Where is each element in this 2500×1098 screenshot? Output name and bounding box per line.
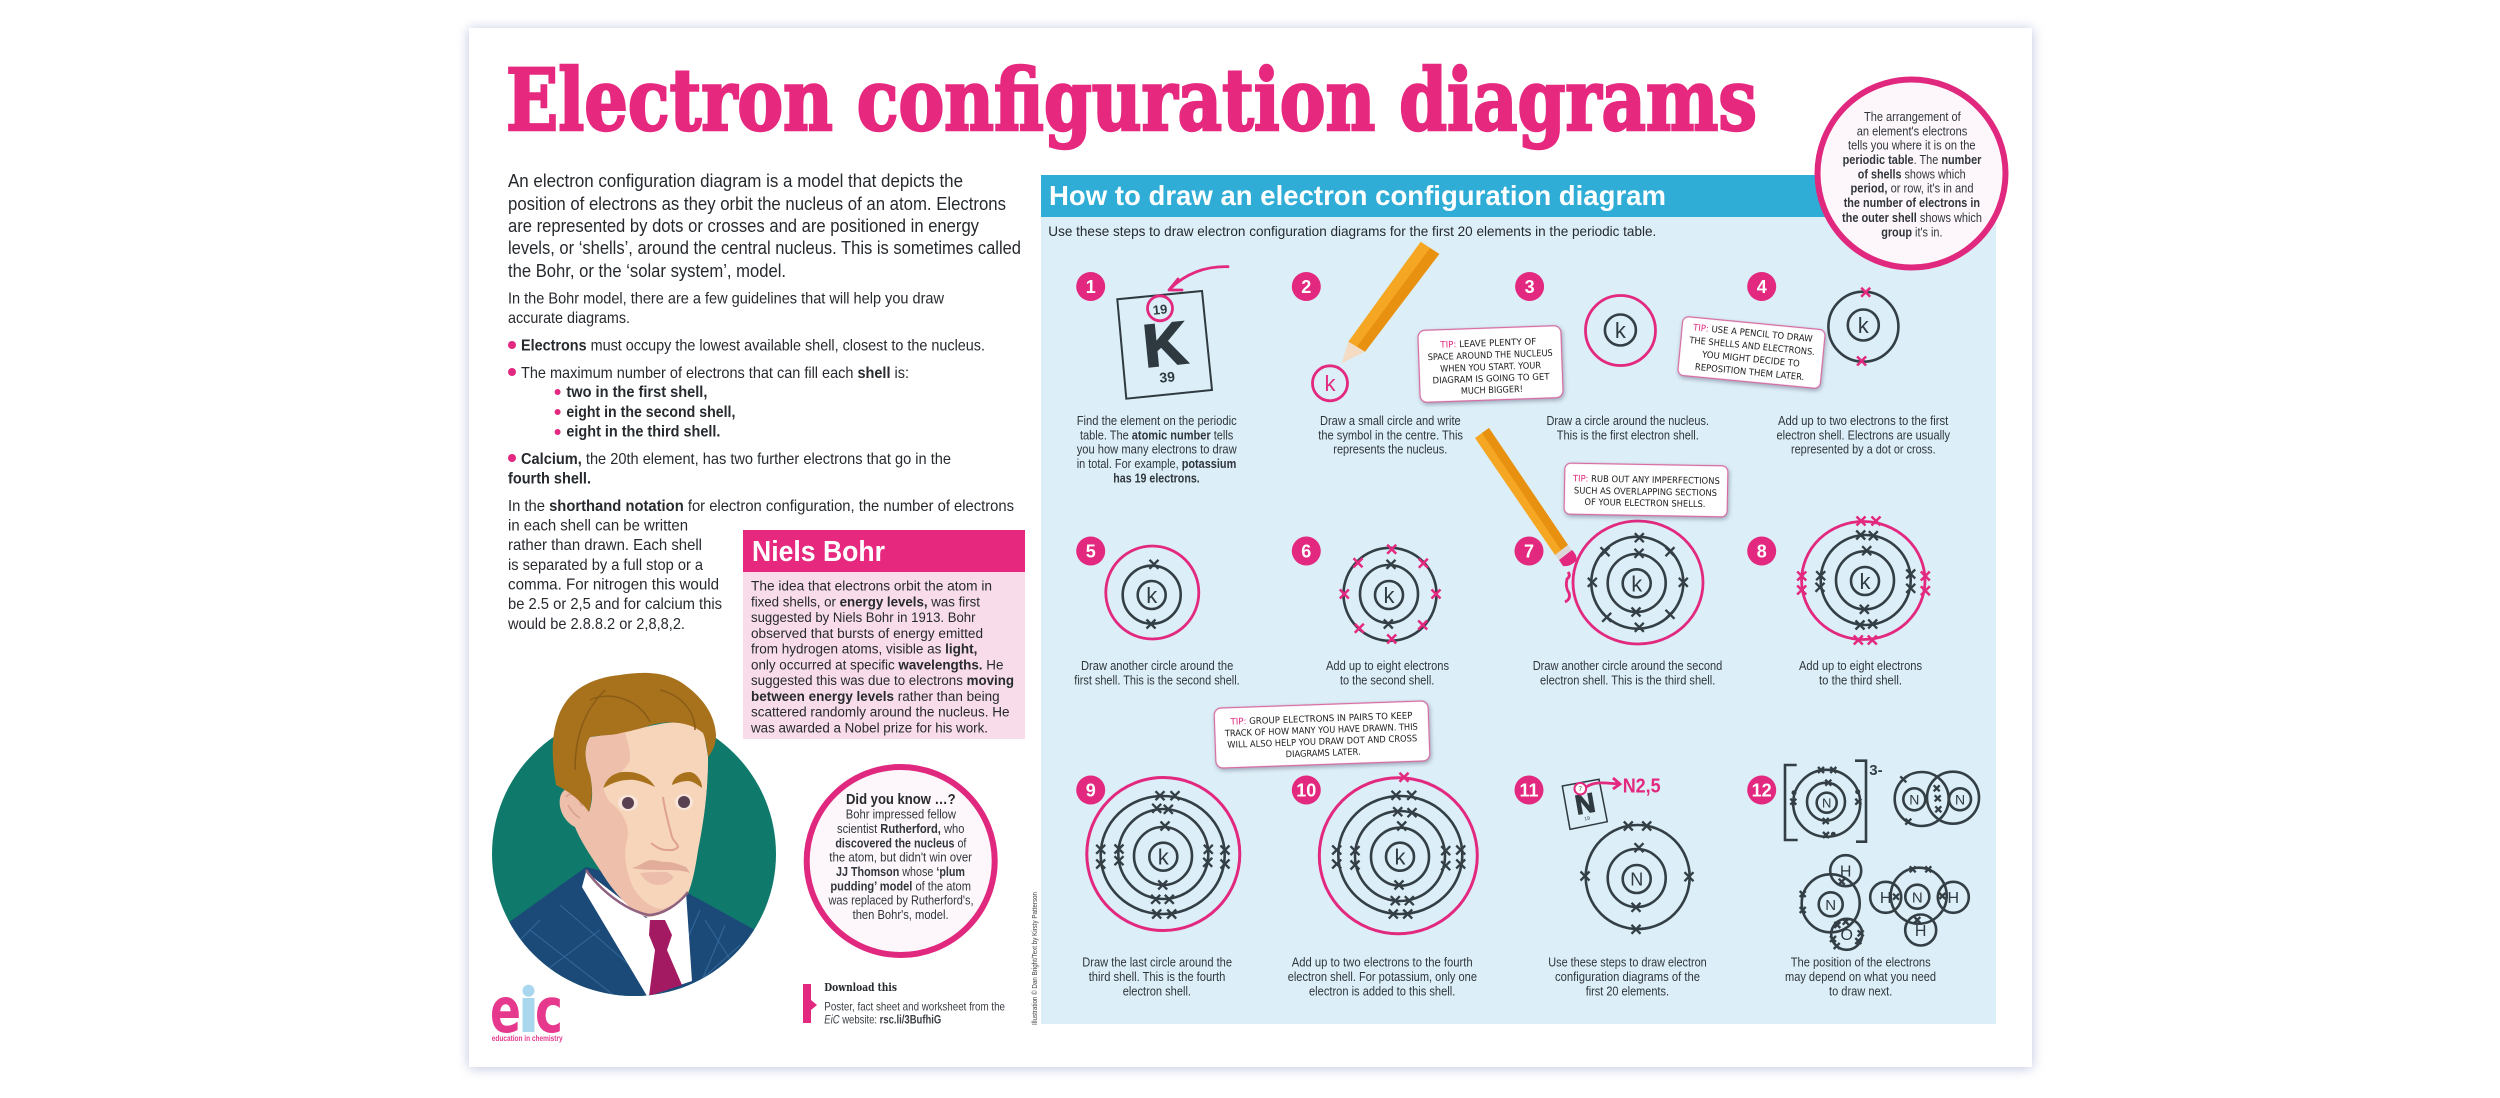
step 2: k — [1324, 371, 1336, 396]
step 8: k — [1860, 569, 1872, 594]
text block: Bohr model guidelines — [508, 290, 985, 488]
diagram: nitrogen compound with hydrogen and oxygen: N — [1825, 897, 1836, 914]
step 1: in total. For example, potassium — [1077, 457, 1236, 471]
text block: shorthand notation: would be 2.8.8.2 or 2,8,8,2. — [507, 616, 685, 633]
text block: introduction: the Bohr, or the ‘solar system’, model. — [508, 260, 786, 281]
text block: Bohr biography: The idea that electrons orbit the atom in — [751, 578, 992, 594]
step 1: table. The atomic number tells — [1080, 428, 1233, 442]
callout: did you know: JJ Thomson whose ‘plum — [836, 865, 965, 879]
callout: download this — [803, 980, 1005, 1027]
step 9: third shell. This is the fourth — [1089, 970, 1225, 984]
tip: rub out: SUCH AS OVERLAPPING SECTIONS — [1574, 486, 1717, 499]
step 1: 1 — [1086, 277, 1096, 297]
logo: education in chemistry — [490, 974, 563, 1047]
callout: arrangement of electrons: an element's electrons — [1857, 124, 1967, 138]
step 1: 39 — [1159, 368, 1176, 386]
tip: use a pencil: REPOSITION THEM LATER. — [1694, 363, 1805, 383]
step 3: 3 — [1525, 277, 1535, 297]
step 11: first 20 elements. — [1586, 984, 1669, 998]
text block: Bohr biography: scattered randomly around the nucleus. He — [751, 705, 1010, 721]
step 10 — [1288, 773, 1477, 998]
tip: group electrons: TIP: GROUP ELECTRONS IN PAIRS TO KEEP — [1229, 711, 1413, 728]
step 1: you how many electrons to draw — [1077, 443, 1237, 457]
icon: pencil eraser — [1475, 428, 1576, 566]
step 3: This is the first electron shell. — [1557, 428, 1699, 442]
text block: shorthand notation: comma. For nitrogen this would — [508, 576, 719, 594]
diagram: nitrogen molecule: N — [1909, 792, 1919, 808]
diagram: ammonia molecule: H — [1915, 923, 1926, 940]
text block: Bohr model guidelines: accurate diagrams. — [508, 310, 630, 327]
callout: download this: EiC website: rsc.li/3BufhiG — [824, 1013, 941, 1027]
diagram: ammonia molecule: H — [1880, 890, 1891, 907]
text block: Bohr model guidelines: In the Bohr model, there are a few guidelines that will help you draw — [508, 290, 944, 308]
text block: Bohr biography: fixed shells, or energy levels, was first — [751, 594, 980, 610]
step 8: Add up to eight electrons — [1799, 659, 1922, 673]
diagram: ammonia molecule: H — [1948, 890, 1959, 907]
diagram: ammonia molecule — [1870, 866, 1969, 946]
panel: how to draw — [1041, 175, 1996, 1024]
callout: did you know: then Bohr's, model. — [853, 908, 949, 922]
panel: Niels Bohr — [743, 530, 1025, 739]
step 10: electron shell. For potassium, only one — [1288, 970, 1477, 984]
callout: download this: Poster, fact sheet and worksheet from the — [824, 1000, 1005, 1014]
text block: Bohr biography: observed that bursts of energy emitted — [751, 626, 983, 642]
text block: shorthand notation: is separated by a full stop or a — [508, 557, 703, 574]
step 6 — [1292, 536, 1449, 687]
callout: arrangement of electrons: The arrangement of — [1864, 110, 1961, 124]
text block: Bohr biography: suggested this was due to electrons moving — [751, 673, 1014, 689]
tip: rub out: TIP: RUB OUT ANY IMPERFECTIONS — [1572, 474, 1720, 487]
step 7: Draw another circle around the second — [1533, 659, 1722, 673]
step 2: the symbol in the centre. This — [1318, 428, 1463, 442]
step 4: k — [1858, 313, 1870, 338]
text block: introduction: levels, or ‘shells’, around the central nucleus. This is sometimes called — [508, 237, 1021, 258]
step 8 — [1747, 516, 1930, 687]
step 1: Find the element on the periodic — [1077, 414, 1237, 428]
step 11 — [1514, 775, 1707, 998]
text block: Bohr model guidelines: fourth shell. — [508, 470, 591, 488]
text block: introduction: position of electrons as they orbit the nucleus of an atom. Electrons — [508, 193, 1006, 214]
step 1: has 19 electrons. — [1113, 471, 1200, 485]
step 5: first shell. This is the second shell. — [1074, 673, 1240, 687]
step 11: Use these steps to draw electron — [1548, 956, 1707, 970]
text block: Bohr model guidelines: two in the first shell, — [566, 384, 707, 401]
text block: shorthand notation — [507, 498, 1014, 633]
step 9 — [1076, 776, 1240, 998]
tip: use a pencil: THE SHELLS AND ELECTRONS. — [1688, 336, 1815, 358]
callout: did you know — [807, 767, 995, 955]
step 11: N2,5 — [1623, 775, 1661, 797]
step 3: Draw a circle around the nucleus. — [1546, 414, 1709, 428]
tip: leave space: DIAGRAM IS GOING TO GET — [1432, 372, 1550, 387]
step 8: 8 — [1757, 542, 1767, 562]
step 12: to draw next. — [1829, 984, 1892, 998]
diagram: nitride ion: 3- — [1869, 762, 1883, 779]
text block: Bohr biography: only occurred at specific wavelengths. He — [751, 657, 1004, 673]
step 11: N — [1630, 870, 1643, 890]
diagram: nitrogen compound with hydrogen and oxygen — [1800, 855, 1864, 950]
tip: use a pencil: YOU MIGHT DECIDE TO — [1701, 350, 1800, 370]
heading: how to draw: How to draw an electron configuration diagram — [1049, 180, 1666, 211]
text block: introduction: are represented by dots or crosses and are positioned in energy — [508, 215, 980, 236]
tip: group electrons: DIAGRAMS LATER. — [1286, 748, 1361, 760]
step 7: electron shell. This is the third shell. — [1540, 673, 1715, 687]
tip: leave space: MUCH BIGGER! — [1461, 385, 1523, 397]
text block: Bohr model guidelines: eight in the third shell. — [566, 424, 720, 440]
diagram: nitrogen molecule — [1895, 772, 1979, 826]
step 11: 7 — [1579, 787, 1583, 793]
step 7: 7 — [1524, 542, 1534, 562]
step 3 — [1515, 272, 1709, 442]
step 12: may depend on what you need — [1785, 970, 1936, 984]
step 9: Draw the last circle around the — [1082, 956, 1232, 970]
diagram: ammonia molecule: N — [1912, 890, 1923, 906]
step 5 — [1074, 536, 1240, 687]
text block: shorthand notation: In the shorthand notation for electron configuration, the number of electrons — [508, 498, 1014, 515]
text block: shorthand notation: rather than drawn. Each shell — [508, 537, 702, 554]
callout: arrangement of electrons: the number of electrons in — [1844, 196, 1980, 210]
text block: Bohr model guidelines: Calcium, the 20th element, has two further electrons that go in the — [521, 451, 951, 468]
step 9: 9 — [1086, 780, 1096, 800]
tip: leave space: WHEN YOU START. YOUR — [1440, 361, 1541, 375]
callout: did you know: the atom, but didn't win over — [829, 851, 972, 865]
callout: did you know: Did you know …? — [846, 791, 956, 808]
step 12: 12 — [1752, 780, 1772, 800]
text block: introduction: An electron configuration diagram is a model that depicts the — [508, 170, 963, 191]
text block: Bohr biography — [750, 578, 1014, 736]
callout: arrangement of electrons: tells you where it is on the — [1848, 139, 1976, 153]
text block: shorthand notation: in each shell can be written — [508, 518, 688, 534]
callout: did you know: Bohr impressed fellow — [846, 807, 957, 821]
step 12 — [1747, 761, 1979, 998]
step 5: k — [1146, 583, 1158, 608]
tip: leave space — [1418, 326, 1563, 402]
text block: Bohr biography: was awarded a Nobel prize for his work. — [750, 720, 988, 736]
step 11: configuration diagrams of the — [1555, 970, 1700, 984]
tip: group electrons: TRACK OF HOW MANY YOU HAVE DRAWN. THIS — [1224, 723, 1418, 739]
step 4: electron shell. Electrons are usually — [1776, 428, 1951, 442]
panel: poster card — [469, 28, 2032, 1067]
step 1: K — [1140, 309, 1190, 380]
callout: arrangement of electrons: the outer shell shows which — [1842, 211, 1982, 225]
step 2: represents the nucleus. — [1333, 443, 1447, 457]
tip: group electrons — [1214, 701, 1430, 768]
logo: education in chemistry: education in chemistry — [492, 1034, 563, 1043]
diagram: nitride ion — [1785, 761, 1883, 842]
step 4: Add up to two electrons to the first — [1778, 414, 1949, 428]
step 4: represented by a dot or cross. — [1791, 443, 1936, 457]
step 4 — [1747, 272, 1951, 457]
callout: arrangement of electrons: periodic table. The number — [1843, 153, 1981, 167]
callout: download this: Download this — [824, 980, 897, 994]
step 2 — [1292, 242, 1463, 457]
text: panel intro: Use these steps to draw electron configuration diagrams for the first 20 elements in the periodic table. — [1048, 223, 1656, 239]
heading: Niels Bohr: Niels Bohr — [752, 536, 885, 568]
step 6: to the second shell. — [1340, 673, 1434, 687]
text block: Bohr biography: suggested by Niels Bohr in 1913. Bohr — [751, 610, 976, 626]
step 5: Draw another circle around the — [1081, 659, 1233, 673]
text block: shorthand notation: be 2.5 or 2,5 and for calcium this — [508, 596, 722, 613]
diagram: nitrogen compound with hydrogen and oxygen: O — [1840, 927, 1853, 944]
step 5: 5 — [1086, 542, 1096, 562]
step 2: Draw a small circle and write — [1320, 414, 1461, 428]
callout: arrangement of electrons: group it's in. — [1881, 226, 1942, 240]
logo: education in chemistry: e — [490, 974, 521, 1047]
step 12: The position of the electrons — [1791, 956, 1931, 970]
step 6: k — [1384, 583, 1396, 608]
callout: arrangement of electrons — [1818, 80, 2006, 268]
logo: education in chemistry: c — [535, 974, 563, 1047]
callout: did you know: discovered the nucleus of — [835, 836, 967, 850]
tip: leave space: SPACE AROUND THE NUCLEUS — [1428, 349, 1553, 363]
tip: rub out: OF YOUR ELECTRON SHELLS. — [1584, 498, 1706, 510]
step 8: to the third shell. — [1819, 673, 1902, 687]
text block: Bohr biography: between energy levels rather than being — [751, 689, 1000, 705]
step 10: electron is added to this shell. — [1309, 984, 1455, 998]
tip: use a pencil: TIP: USE A PENCIL TO DRAW — [1692, 323, 1813, 345]
step 2: 2 — [1301, 277, 1311, 297]
text block: introduction — [508, 170, 1021, 281]
text block: Bohr model guidelines: eight in the second shell, — [566, 404, 735, 421]
callout: did you know: was replaced by Rutherford's, — [828, 894, 974, 908]
step 9: electron shell. — [1123, 984, 1191, 998]
tip: use a pencil — [1678, 316, 1825, 389]
step 7: k — [1631, 571, 1643, 596]
step 1 — [1076, 267, 1237, 485]
text block: Bohr model guidelines: Electrons must occupy the lowest available shell, closest to the nucleus. — [521, 338, 985, 354]
diagram: nitrogen compound with hydrogen and oxygen: H — [1840, 864, 1851, 880]
step 6: Add up to eight electrons — [1326, 659, 1449, 673]
callout: arrangement of electrons: of shells shows which — [1858, 167, 1966, 181]
credit line: Illustration © Dan Bright/Text by Kirsty Patterson — [1030, 892, 1039, 1025]
step 10: 10 — [1296, 780, 1316, 800]
step 7 — [1475, 428, 1722, 687]
text block: Bohr biography: from hydrogen atoms, visible as light, — [751, 642, 977, 658]
title: Electron configuration diagrams — [506, 51, 1757, 151]
diagram: nitride ion: N — [1822, 796, 1831, 810]
step 1: 19 — [1152, 301, 1168, 318]
illustration: portrait of Niels Bohr — [492, 672, 776, 996]
step 4: 4 — [1757, 277, 1767, 297]
step 10: k — [1394, 845, 1406, 870]
tip: rub out — [1564, 463, 1728, 517]
step 3: k — [1615, 318, 1627, 343]
callout: did you know: scientist Rutherford, who — [837, 822, 964, 836]
step 9: k — [1158, 845, 1170, 870]
callout: did you know: pudding’ model of the atom — [830, 879, 971, 893]
tip: leave space: TIP: LEAVE PLENTY OF — [1439, 337, 1536, 351]
step 6: 6 — [1301, 542, 1311, 562]
callout: arrangement of electrons: period, or row, it's in and — [1850, 182, 1974, 196]
step 11: 19 — [1584, 816, 1591, 822]
diagram: nitrogen molecule: N — [1955, 792, 1965, 808]
tip: group electrons: WILL ALSO HELP YOU DRAW DOT AND CROSS — [1227, 734, 1418, 751]
text block: Bohr model guidelines: The maximum number of electrons that can fill each shell is: — [521, 365, 909, 382]
step 11: N — [1573, 788, 1597, 820]
step 11: 11 — [1519, 780, 1539, 800]
step 10: Add up to two electrons to the fourth — [1292, 956, 1473, 970]
